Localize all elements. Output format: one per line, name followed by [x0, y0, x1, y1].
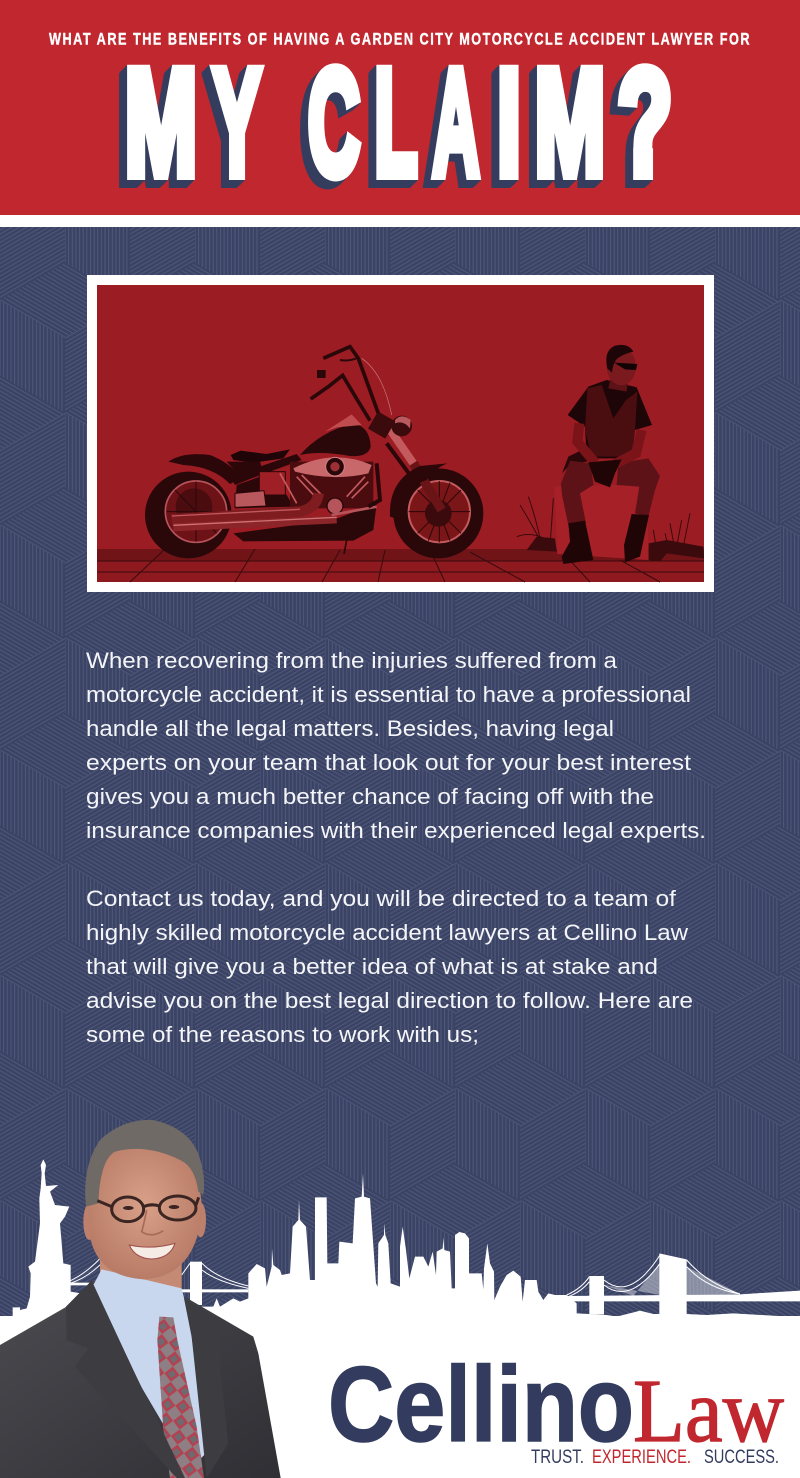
paragraph two: some of the reasons to work with us;	[86, 1022, 479, 1047]
title: I	[497, 38, 521, 206]
handlebars	[311, 347, 392, 421]
paragraph two: advise you on the best legal direction to follow. Here are	[86, 988, 693, 1013]
tie	[157, 1317, 204, 1478]
paragraph two: highly skilled motorcycle accident lawyers at Cellino Law	[86, 920, 688, 945]
tagline: EXPERIENCE.	[592, 1447, 691, 1468]
title: A	[433, 38, 479, 206]
legs	[561, 458, 660, 525]
title: L	[374, 38, 418, 206]
front fork	[368, 420, 442, 510]
paragraph one: motorcycle accident, it is essential to have a professional	[86, 682, 691, 707]
paragraph one	[86, 648, 706, 843]
footboard	[235, 491, 266, 507]
exhaust pipes	[172, 493, 377, 527]
smile	[129, 1243, 175, 1259]
oil bag	[259, 472, 285, 495]
face	[87, 1143, 202, 1279]
eyes	[123, 1205, 179, 1210]
paragraph two: Contact us today, and you will be directed to a team of	[86, 886, 677, 911]
engine	[280, 457, 373, 514]
logo: Law: Law	[633, 1362, 784, 1461]
paragraph one: insurance companies with their experienced legal experts.	[86, 818, 706, 843]
boots	[562, 514, 649, 564]
neck	[100, 1243, 182, 1297]
title: ?	[618, 38, 672, 206]
arms	[577, 423, 642, 464]
vest	[585, 385, 637, 457]
tagline: TRUST.	[531, 1447, 584, 1468]
body text	[86, 648, 706, 1047]
lapels	[66, 1281, 228, 1478]
nose	[142, 1210, 163, 1235]
tagline	[531, 1447, 779, 1468]
paragraph two: that will give you a better idea of what is at stake and	[86, 954, 658, 979]
Cellino Law logo	[328, 1344, 784, 1468]
white NYC skyline	[0, 1159, 800, 1478]
suit	[0, 1281, 281, 1478]
kickstand	[344, 537, 347, 554]
mirror	[317, 370, 326, 378]
shirt	[568, 380, 652, 458]
header band	[0, 0, 800, 227]
glasses	[97, 1196, 199, 1222]
motorcycle	[145, 347, 483, 558]
headlight	[368, 411, 412, 439]
belly shadow	[233, 503, 377, 541]
tagline: SUCCESS.	[704, 1447, 779, 1468]
fuel tank	[300, 414, 371, 456]
photo wall	[97, 285, 704, 582]
patterned navy background	[0, 227, 800, 1357]
photo frame	[87, 275, 714, 592]
title: C	[308, 38, 359, 206]
lawyer portrait	[0, 1120, 281, 1478]
title	[119, 38, 672, 206]
logo: Cellino: Cellino	[328, 1344, 634, 1464]
ears	[83, 1203, 206, 1240]
photo: biker with motorcycle	[87, 275, 714, 592]
skyline right: downtown and bridge	[400, 1227, 800, 1478]
neck and head	[606, 345, 637, 392]
paragraph two	[86, 886, 693, 1047]
paragraph one: experts on your team that look out for your best interest	[86, 750, 691, 775]
title: Y	[212, 38, 261, 206]
paragraph one: handle all the legal matters. Besides, having legal	[86, 716, 614, 741]
front wheel	[393, 468, 483, 558]
skyline left: statue of liberty and midtown	[0, 1159, 400, 1478]
front fender	[390, 463, 447, 518]
rear wheel	[145, 472, 232, 558]
paragraph one: gives you a much better chance of facing off with the	[86, 784, 654, 809]
white ground	[0, 1316, 800, 1478]
photo ground	[97, 549, 704, 582]
concrete block	[554, 484, 649, 560]
title: M	[535, 38, 605, 206]
jacket tail	[562, 449, 587, 473]
hair	[85, 1120, 204, 1207]
shirt	[91, 1269, 206, 1478]
rear fender and seat	[168, 449, 302, 508]
gloves	[588, 459, 622, 487]
weeds	[517, 497, 690, 553]
man sitting	[517, 345, 704, 564]
title: M	[124, 38, 197, 206]
paragraph one: When recovering from the injuries suffered from a	[86, 648, 618, 673]
